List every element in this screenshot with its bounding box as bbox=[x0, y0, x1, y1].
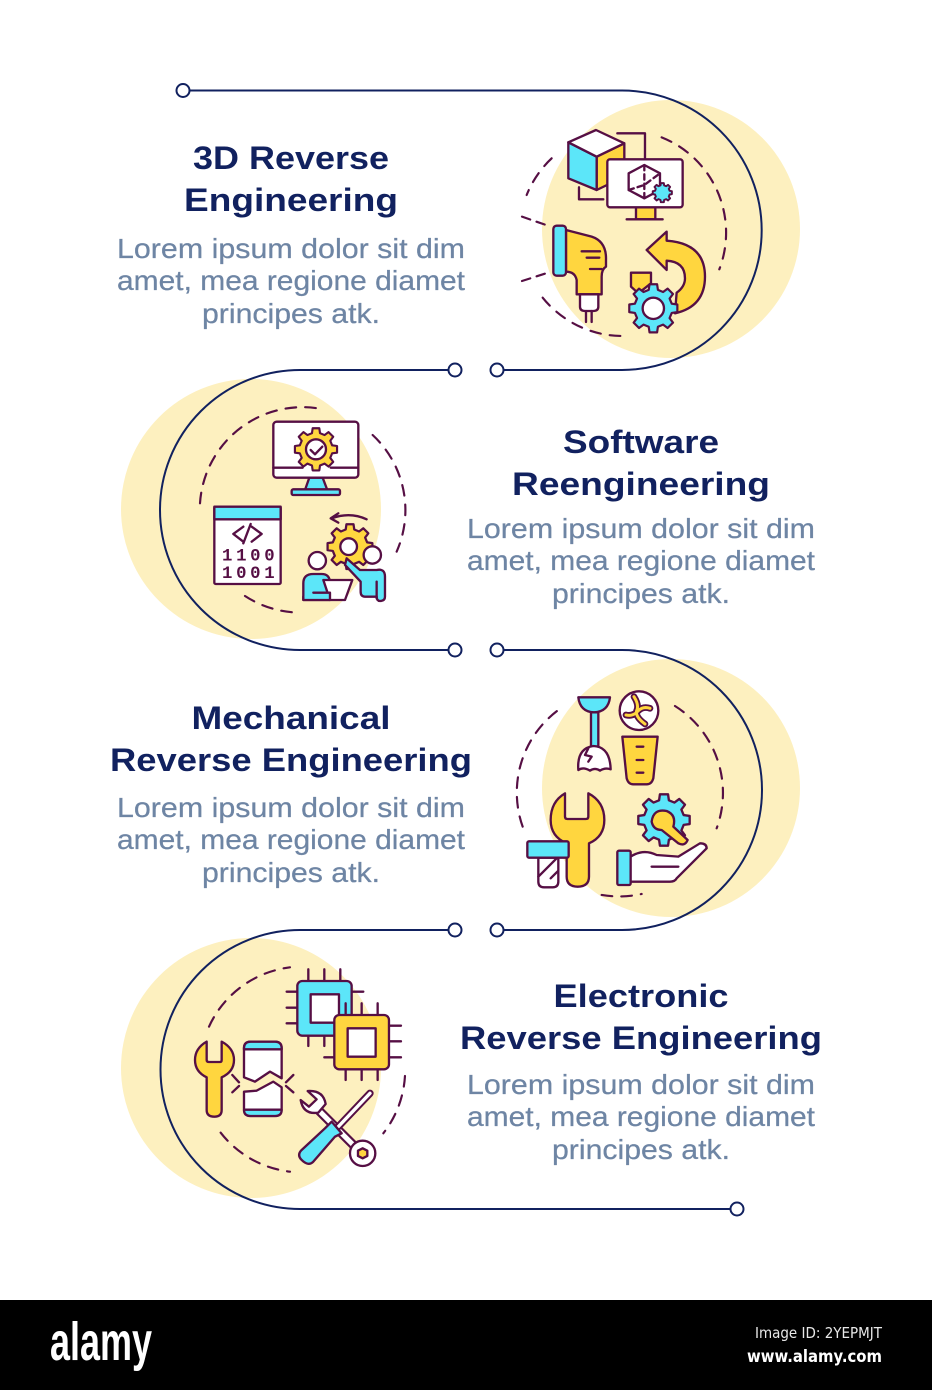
heading: Electronic Reverse Engineering: Reverse Engineering bbox=[460, 1020, 822, 1056]
heading: Mechanical Reverse Engineering: Mechanical bbox=[192, 700, 390, 736]
heading: Electronic Reverse Engineering bbox=[460, 978, 822, 1056]
icon: code window, monitor and team: 1001 bbox=[222, 565, 275, 584]
heading: Software Reengineering bbox=[512, 424, 770, 502]
text block 3: amet, mea regione diamet bbox=[117, 824, 465, 855]
website: www.alamy.com bbox=[747, 1347, 882, 1367]
image id: Image ID: 2YEPMJT bbox=[755, 1324, 883, 1342]
panel: 3D Reverse Engineering bbox=[117, 100, 800, 358]
text block 4 bbox=[467, 1069, 815, 1165]
panel: Mechanical Reverse Engineering bbox=[110, 659, 800, 917]
text block 4: Lorem ipsum dolor sit dim bbox=[467, 1069, 815, 1100]
text block 4: amet, mea regione diamet bbox=[467, 1101, 815, 1132]
text block 1 bbox=[117, 233, 465, 329]
panel: Electronic Reverse Engineering bbox=[121, 938, 822, 1198]
text block 1: amet, mea regione diamet bbox=[117, 265, 465, 296]
footer logo: alamy bbox=[50, 1312, 152, 1372]
yellow circle 3 bbox=[542, 659, 800, 917]
icon: mechanical parts and wrench bbox=[517, 691, 723, 896]
heading: Software Reengineering: Reengineering bbox=[512, 466, 770, 502]
text block 2 bbox=[467, 513, 815, 609]
text block 2: Lorem ipsum dolor sit dim bbox=[467, 513, 815, 544]
connector line bbox=[160, 84, 762, 1216]
text block 3: Lorem ipsum dolor sit dim bbox=[117, 792, 465, 823]
heading: Software Reengineering: Software bbox=[563, 424, 719, 460]
panel: Software Reengineering bbox=[121, 379, 815, 639]
heading: Mechanical Reverse Engineering bbox=[110, 700, 472, 778]
text block 3: principes atk. bbox=[202, 857, 380, 888]
yellow circle 1 bbox=[542, 100, 800, 358]
heading: 3D Reverse Engineering: Engineering bbox=[184, 182, 398, 218]
heading: 3D Reverse Engineering: 3D Reverse bbox=[193, 140, 389, 176]
text block 1: principes atk. bbox=[202, 298, 380, 329]
heading: Mechanical Reverse Engineering: Reverse Engineering bbox=[110, 742, 472, 778]
footer band bbox=[0, 1300, 932, 1390]
text block 3 bbox=[117, 792, 465, 888]
text block 1: Lorem ipsum dolor sit dim bbox=[117, 233, 465, 264]
text block 2: amet, mea regione diamet bbox=[467, 545, 815, 576]
icon: code window, monitor and team: 1100 bbox=[222, 548, 275, 567]
icon: chips, broken phone and tools bbox=[195, 967, 405, 1172]
icon: 3D modelling, drill and gear bbox=[522, 130, 726, 336]
text block 4: principes atk. bbox=[552, 1134, 730, 1165]
heading: Electronic Reverse Engineering: Electronic bbox=[554, 978, 728, 1014]
text block 2: principes atk. bbox=[552, 578, 730, 609]
yellow circle 4 bbox=[121, 938, 381, 1198]
icon: code window, monitor and team bbox=[200, 407, 405, 613]
yellow circle 2 bbox=[121, 379, 381, 639]
heading: 3D Reverse Engineering bbox=[184, 140, 398, 218]
